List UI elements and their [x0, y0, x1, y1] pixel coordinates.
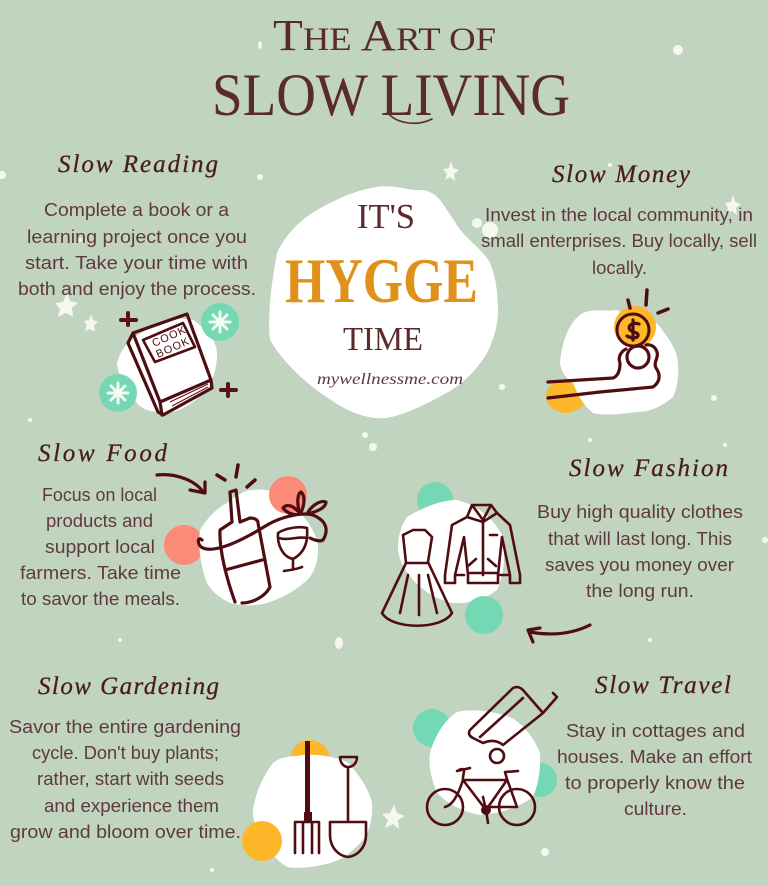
- icon: wine bottle and glass: [164, 465, 326, 605]
- arrow: [157, 475, 205, 493]
- icon: cook book: COOK: [150, 324, 188, 350]
- heading: Slow Money: [552, 161, 691, 188]
- body text: support local: [45, 537, 155, 557]
- body text: Stay in cottages and: [566, 721, 745, 741]
- title line: Slow Living: SLOW LIVING: [212, 62, 570, 128]
- body text: [20, 485, 181, 609]
- panel: slow gardening: [9, 673, 372, 868]
- body text: rather, start with seeds: [37, 769, 224, 789]
- panel: slow food: [20, 440, 326, 609]
- body text: to properly know the: [565, 773, 745, 793]
- panel: slow money: [481, 161, 757, 415]
- body text: grow and bloom over time.: [10, 822, 241, 842]
- body text: farmers. Take time: [20, 563, 181, 583]
- body text: and experience them: [44, 796, 219, 816]
- icon: pitchfork and spade: [242, 740, 372, 868]
- body text: Focus on local: [42, 485, 157, 505]
- body text: start. Take your time with: [25, 253, 248, 273]
- heading: Slow Fashion: [569, 455, 728, 482]
- body text: locally.: [592, 258, 647, 278]
- website: mywellnessme.com: [317, 371, 463, 388]
- body text: small enterprises. Buy locally, sell: [481, 231, 757, 251]
- panel: slow fashion: [382, 455, 743, 642]
- body text: [9, 717, 241, 842]
- center badge: It's Hygge Time: [269, 186, 498, 418]
- heading: Slow Food: [38, 440, 168, 467]
- heading: Slow Gardening: [38, 673, 219, 700]
- body text: houses. Make an effort: [557, 747, 752, 767]
- body text: culture.: [624, 799, 687, 819]
- panel: slow travel: [413, 672, 752, 825]
- panel: slow reading: [18, 151, 256, 415]
- icon: suitcase and bicycle: [413, 687, 557, 825]
- body text: Complete a book or a: [44, 200, 230, 220]
- Hygge: HYGGE: [285, 245, 478, 316]
- heading: Slow Travel: [595, 672, 731, 699]
- heading: Slow Reading: [58, 151, 218, 178]
- body text: [557, 721, 752, 819]
- icon: cook book: [99, 303, 239, 415]
- body text: to savor the meals.: [21, 589, 180, 609]
- body text: [481, 205, 757, 278]
- body text: Savor the entire gardening: [9, 717, 241, 737]
- title line: The Art of: THE ART OF: [273, 11, 496, 60]
- body text: products and: [46, 511, 153, 531]
- body text: learning project once you: [27, 227, 247, 247]
- body text: cycle. Don't buy plants;: [32, 743, 219, 763]
- arrow: [528, 625, 590, 642]
- white blob: [269, 186, 498, 418]
- swash under L: [388, 113, 432, 123]
- It's: IT'S: [357, 197, 415, 236]
- body text: [537, 502, 743, 601]
- Time: TIME: [343, 321, 423, 358]
- icon: cook book: BOOK: [154, 335, 192, 361]
- body text: saves you money over: [545, 555, 734, 575]
- body text: both and enjoy the process.: [18, 279, 256, 299]
- body text: Invest in the local community, in: [485, 205, 753, 225]
- body text: Buy high quality clothes: [537, 502, 743, 522]
- icon: dress and jacket: [382, 482, 520, 634]
- body text: that will last long. This: [548, 529, 732, 549]
- body text: the long run.: [586, 581, 694, 601]
- icon: hand holding coin: [546, 290, 678, 415]
- body text: [18, 200, 256, 299]
- title: [212, 11, 570, 128]
